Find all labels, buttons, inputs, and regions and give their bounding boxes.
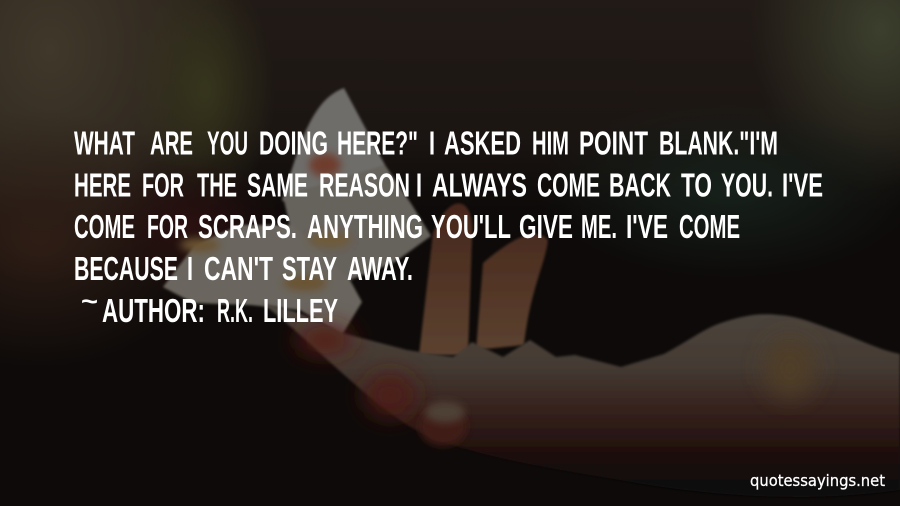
author line: R.K. xyxy=(217,293,253,330)
quote text: HIM xyxy=(532,126,569,162)
quote text: COME xyxy=(74,209,135,246)
quote text: DOING xyxy=(259,126,328,162)
quote text: FOR xyxy=(142,168,184,204)
quote text: ARE xyxy=(150,126,193,162)
quote text: YOU'LL xyxy=(431,209,511,246)
quote text: BECAUSE xyxy=(74,251,178,288)
quote text: ALWAYS xyxy=(432,168,527,204)
quote text: I'VE xyxy=(626,209,668,246)
quote text: THE xyxy=(197,168,237,204)
watermark: quotessayings.net xyxy=(750,471,885,490)
author line: ~ xyxy=(81,286,98,316)
quote text: FOR xyxy=(147,209,188,246)
quote text: BLANK."I'M xyxy=(659,126,778,162)
quote text: YOU xyxy=(207,126,248,162)
butterfly xyxy=(163,88,431,335)
quote text: COME xyxy=(679,209,740,246)
quote text: BACK xyxy=(609,168,671,204)
quote text: GIVE xyxy=(519,209,573,246)
hand xyxy=(262,203,900,497)
author line xyxy=(81,286,338,330)
quote text: HERE?" xyxy=(337,126,418,162)
quote text: AWAY. xyxy=(347,251,413,288)
quote text: I xyxy=(187,251,193,288)
quote text: CAN'T xyxy=(204,251,273,288)
quote text: WHAT xyxy=(74,126,135,162)
quote text xyxy=(74,126,823,288)
quote text: SAME xyxy=(247,168,308,204)
quote text: POINT xyxy=(579,126,648,162)
quote text: REASON xyxy=(319,168,410,204)
quote text: I xyxy=(429,126,435,162)
quote text: STAY xyxy=(282,251,337,288)
quote text: COME xyxy=(537,168,600,204)
quote text: ME. xyxy=(581,209,617,246)
author line: LILLEY xyxy=(263,293,338,330)
quote text: TO xyxy=(681,168,712,204)
quote text: ASKED xyxy=(444,126,521,162)
quote text: I'VE xyxy=(782,168,823,204)
quote text: YOU. xyxy=(721,168,773,204)
quote text: I xyxy=(416,168,422,204)
quote text: ANYTHING xyxy=(307,209,423,246)
quote text: SCRAPS. xyxy=(198,209,297,246)
quote text: HERE xyxy=(74,168,131,204)
author line: AUTHOR: xyxy=(102,293,205,330)
